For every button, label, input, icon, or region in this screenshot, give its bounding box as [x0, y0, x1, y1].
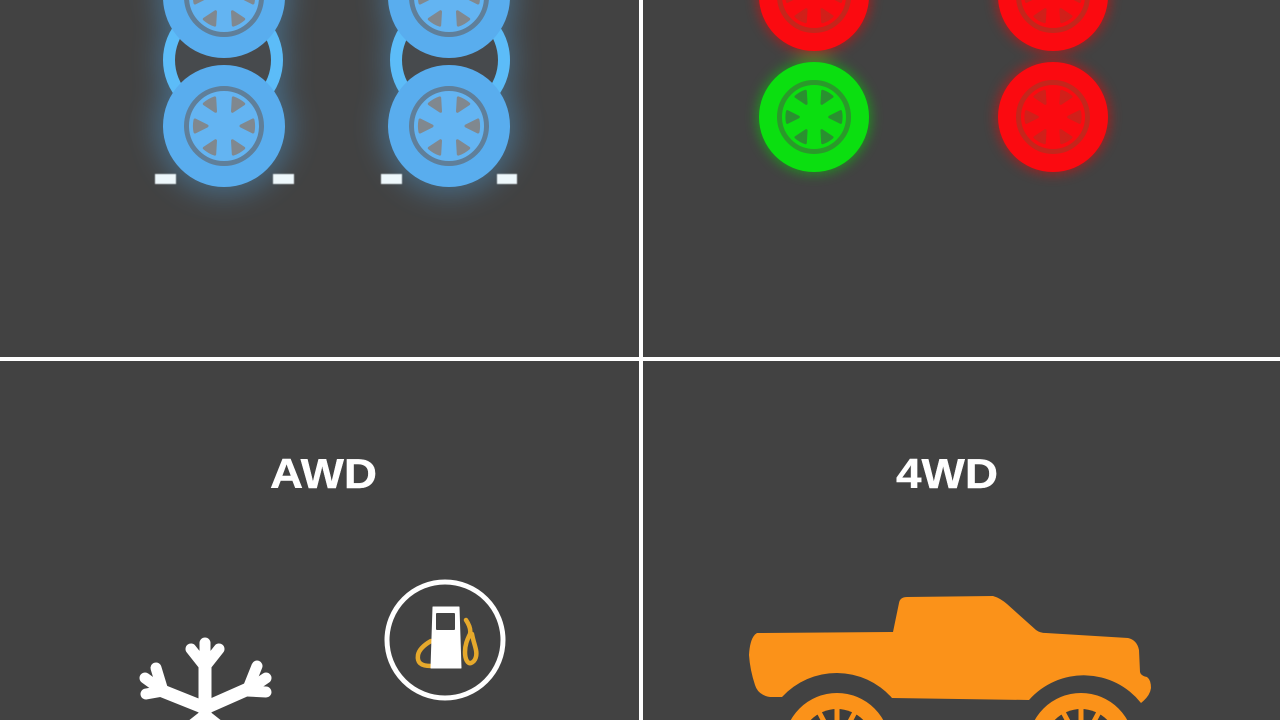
red wheel top left — [759, 0, 869, 51]
pump window — [436, 613, 455, 630]
heading: 4WD: 4WD — [896, 450, 998, 497]
icon: snowflake — [145, 643, 266, 720]
red wheel top right — [998, 0, 1108, 51]
right linked wheel pair — [388, 0, 510, 187]
red and green glow — [757, 0, 1110, 174]
heading: AWD: AWD — [270, 450, 377, 497]
left linked wheel pair — [163, 0, 285, 187]
icon: orange truck — [749, 596, 1151, 720]
white tread marks — [155, 174, 517, 184]
pump hose — [418, 620, 476, 666]
green wheel — [759, 62, 869, 172]
panel: blue linked wheels — [155, 0, 517, 194]
blue glow — [156, 0, 517, 194]
truck wheels — [784, 693, 1134, 720]
icon: fuel pump in circle — [387, 582, 503, 698]
red wheel bottom right — [998, 62, 1108, 172]
truck body — [749, 596, 1151, 703]
panel: red and green wheels — [757, 0, 1110, 174]
pump body — [431, 607, 461, 668]
